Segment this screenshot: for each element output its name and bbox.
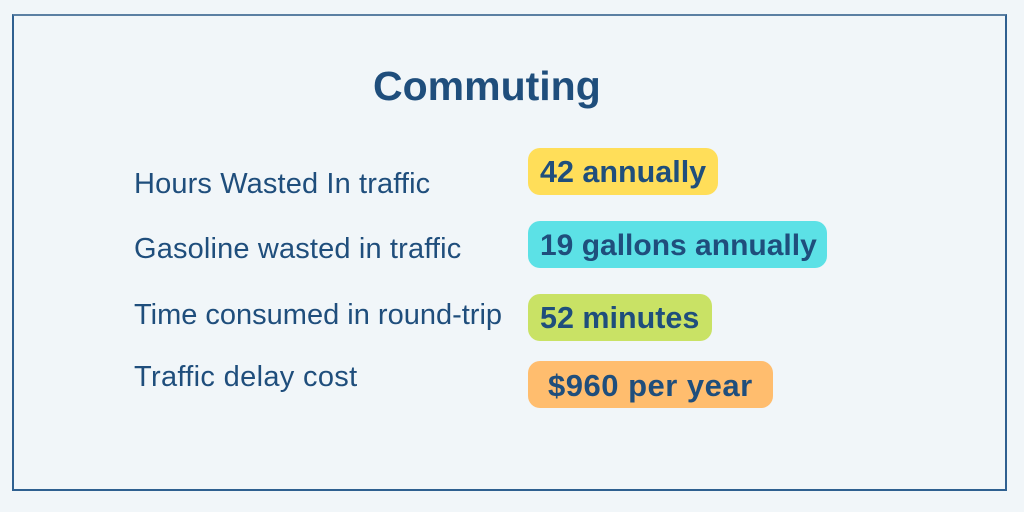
label: delay cost: Traffic delay cost: [134, 361, 358, 393]
pill: cost value: [528, 361, 773, 408]
value: time: 52 minutes: [540, 301, 699, 335]
value: cost: $960 per year: [548, 368, 753, 403]
label: hours wasted: Hours Wasted In traffic: [134, 168, 430, 200]
title: Commuting: [373, 63, 601, 109]
pill: time value: [528, 294, 712, 341]
pill: gasoline value: [528, 221, 827, 268]
value: gasoline: 19 gallons annually: [540, 229, 817, 262]
pill: hours value: [528, 148, 718, 195]
label: gasoline wasted: Gasoline wasted in traffic: [134, 233, 461, 265]
label: time consumed: Time consumed in round-trip: [134, 299, 502, 331]
value: hours: 42 annually: [540, 155, 706, 189]
